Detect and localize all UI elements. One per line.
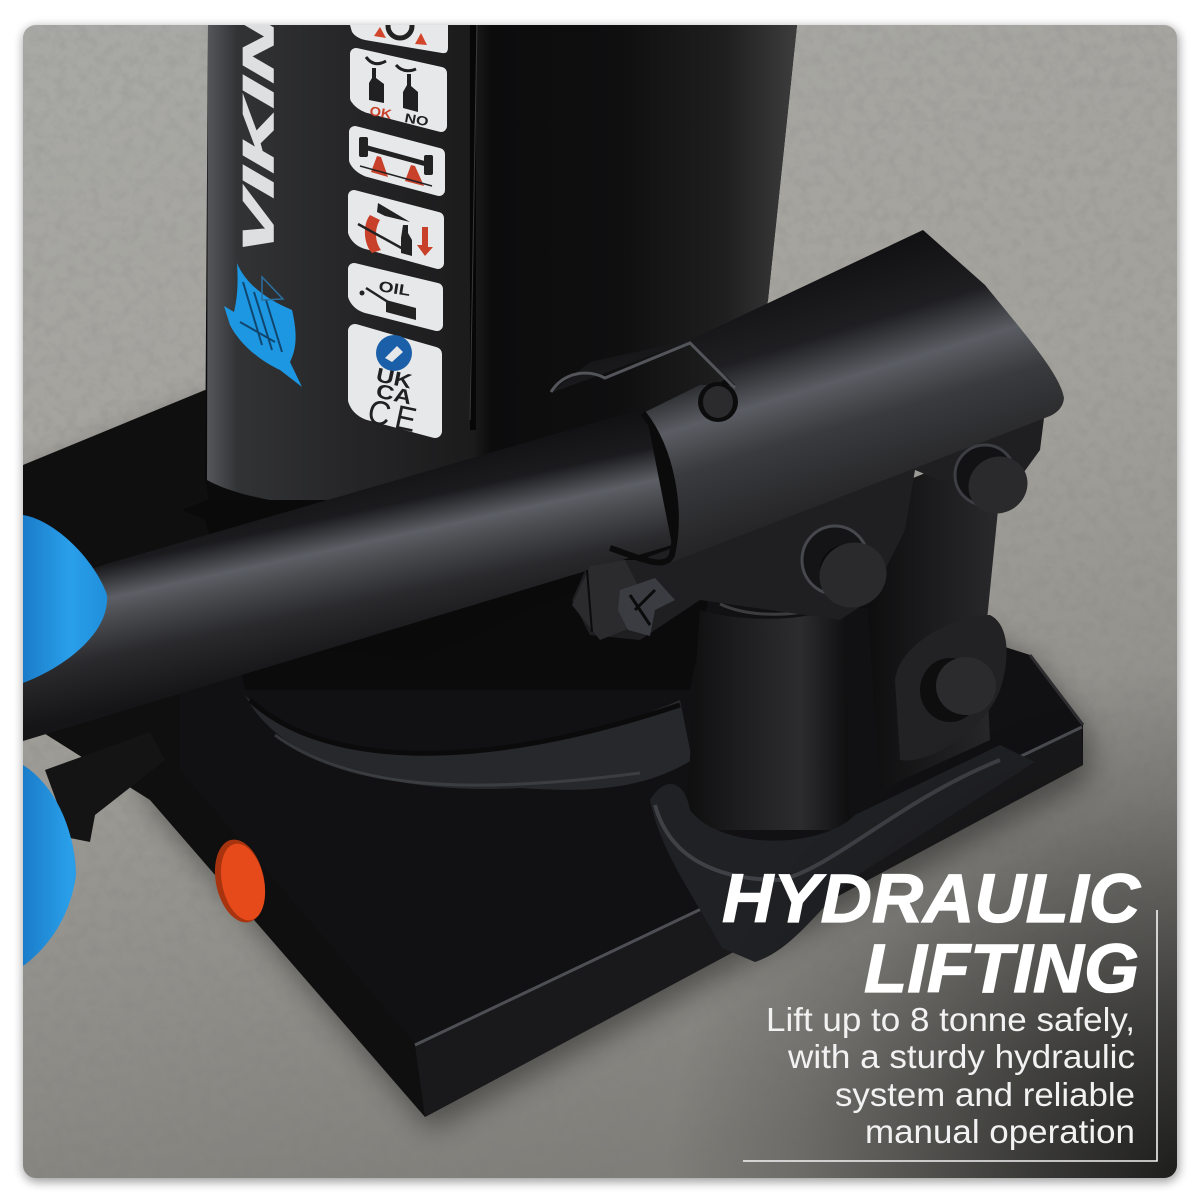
handle sleeve [550,230,1064,563]
drain valve knob [45,756,130,842]
jack cylinder [182,25,797,690]
sleeve pin [698,382,738,422]
corner frame lines [743,910,1157,1161]
label: oil [354,269,437,325]
label: manual, UKCA, CE: CE [364,393,425,441]
label: ok / no [356,54,441,129]
front bolt [800,524,886,608]
lower pivot bolt and washer [895,615,1007,760]
label: oil: OIL [377,278,412,300]
red reflector [214,840,266,922]
icon: blue glove fingers [23,515,107,966]
description text: manual operation [865,1113,1135,1150]
label: jack warning top [350,25,448,54]
handle tube [23,408,672,741]
heading: LIFTING [864,930,1139,1007]
pump column behind body [868,474,998,770]
lever link body [572,410,1045,640]
jack base plate [23,390,1089,1130]
icon: blue viking ship logo [224,263,302,387]
label: manual, UKCA, CE: UK [374,364,414,394]
corner vignette [727,720,1177,1178]
description text [766,1001,1135,1150]
label: manual, UKCA, CE: CA [374,380,414,409]
link plate and nut [572,560,675,640]
round jack foot collar and weld [245,695,692,790]
label: ok / no: NO [403,110,430,129]
description text: Lift up to 8 tonne safely, [766,1001,1135,1038]
pump column [650,602,1035,962]
rear bolt [954,444,1028,514]
label: ok / no: OK [368,103,393,122]
label: wheel chock [354,196,438,263]
safety label stack [350,14,448,441]
description text: system and reliable [835,1076,1135,1113]
description text: with a sturdy hydraulic [787,1038,1135,1075]
label: axle stands [355,132,439,190]
heading [722,860,1141,1007]
cylinder brand text: VIKING [235,0,283,260]
heading: HYDRAULIC [722,860,1141,937]
label: manual, UKCA, CE [355,331,435,441]
